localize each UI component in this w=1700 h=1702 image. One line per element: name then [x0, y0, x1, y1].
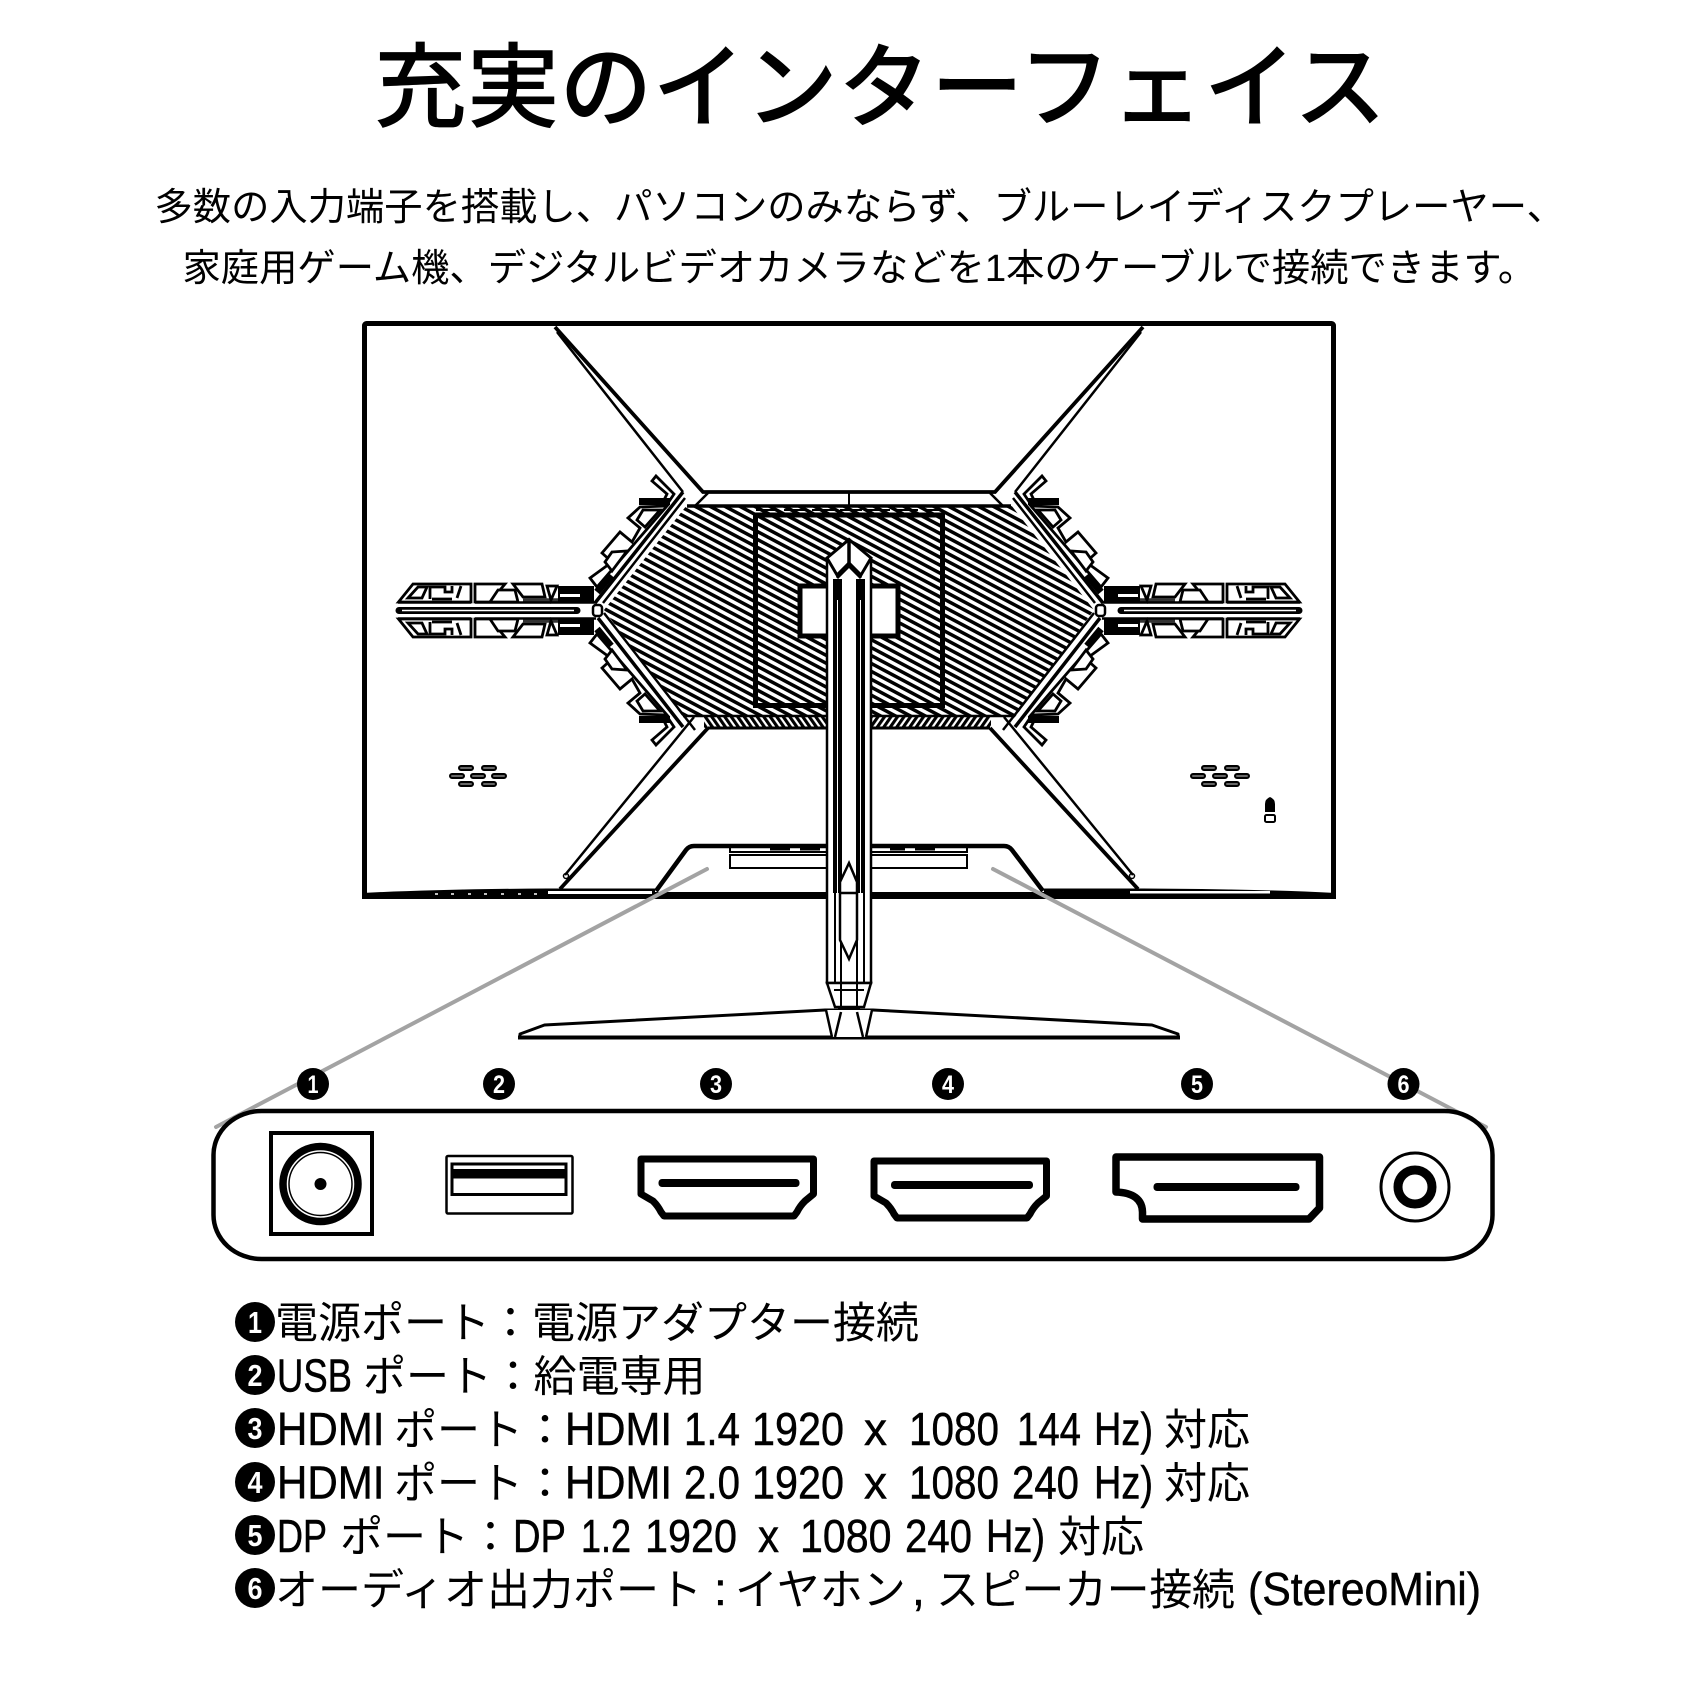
- list item 6: ,: [912, 1563, 925, 1615]
- list item 5: [235, 1510, 1144, 1562]
- stand base: [520, 1010, 1178, 1038]
- list item 5: 1.2: [581, 1510, 631, 1562]
- list item 5: DP: [277, 1510, 327, 1562]
- list item 3: Hz): [1094, 1403, 1153, 1455]
- icon: security lock slot: [1265, 797, 1275, 822]
- list item 4: 1080: [909, 1456, 999, 1508]
- description text: [154, 186, 1565, 290]
- list item 2: [235, 1350, 706, 1402]
- list item 5: DP: [513, 1510, 566, 1562]
- neck diamond: [840, 863, 857, 959]
- list item 5: Hz): [986, 1510, 1045, 1562]
- list item 4: 240: [1012, 1456, 1079, 1508]
- list item 3: 3: [248, 1411, 262, 1446]
- title: 充実のインターフェイス: [374, 36, 1386, 140]
- port number markers: 3: [710, 1071, 722, 1099]
- list item 3: 対応: [1164, 1407, 1250, 1455]
- list item 3: 144: [1017, 1403, 1081, 1455]
- list item 1: 電源アダプター接続: [532, 1300, 919, 1348]
- list item 2: ：: [492, 1354, 534, 1402]
- list item 4: x: [864, 1456, 887, 1508]
- list item 5: ポート: [340, 1514, 469, 1562]
- dark vent strip: [704, 717, 827, 728]
- list item 6: スピーカー接続: [936, 1567, 1235, 1615]
- icon: power port: [271, 1133, 372, 1234]
- list item 4: Hz): [1094, 1456, 1153, 1508]
- list item 4: [235, 1456, 1250, 1508]
- list item 1: [235, 1300, 919, 1348]
- list item 5: ：: [469, 1514, 512, 1562]
- list item 4: ：: [524, 1460, 566, 1508]
- list item 3: ポート: [394, 1407, 523, 1455]
- list item 4: HDMI: [277, 1456, 384, 1508]
- stand neck: [827, 540, 871, 983]
- list item 2: 給電専用: [534, 1354, 706, 1402]
- list item 5: 1080: [800, 1510, 892, 1562]
- neck bands: [838, 579, 860, 893]
- icon: audio jack: [1381, 1153, 1449, 1221]
- list item 2: 2: [248, 1358, 262, 1393]
- list item 5: 5: [248, 1518, 262, 1553]
- port number markers: 1: [308, 1071, 319, 1099]
- list item 4: HDMI: [565, 1456, 672, 1508]
- speaker grille left: [450, 766, 506, 786]
- mount brackets: [800, 586, 830, 636]
- description text: 家庭用ゲーム機、デジタルビデオカメラなどを1本のケーブルで接続できます。: [182, 247, 1536, 290]
- list item 5: x: [758, 1510, 779, 1562]
- list item 1: 1: [248, 1305, 262, 1340]
- neck head chevrons: [827, 540, 871, 575]
- list item 4: 対応: [1164, 1460, 1250, 1508]
- list item 3: [235, 1403, 1250, 1455]
- panel: port strip: [214, 1111, 1492, 1259]
- list item 4: ポート: [394, 1460, 523, 1508]
- lower wings: [560, 717, 1138, 889]
- monitor outline: [364, 324, 1334, 896]
- list item 5: 対応: [1058, 1514, 1144, 1562]
- list item 3: 1080: [909, 1403, 999, 1455]
- monitor rear illustration: [362, 324, 1336, 899]
- list item 6: [235, 1563, 1481, 1615]
- list item 2: ポート: [363, 1354, 492, 1402]
- monitor stand: [518, 540, 1180, 1038]
- bottom bezel: [362, 888, 1336, 899]
- hatched hexagon back panel: [604, 505, 1094, 717]
- list item 4: 2.0: [684, 1456, 740, 1508]
- port number markers: 5: [1191, 1071, 1203, 1099]
- neck yoke: [827, 983, 871, 1007]
- port number markers: [297, 1068, 1420, 1100]
- description text: 多数の入力端子を搭載し、パソコンのみならず、ブルーレイディスクプレーヤー、: [154, 186, 1565, 229]
- bottom port cutout: [656, 846, 1043, 891]
- VESA mount plate: [756, 515, 942, 706]
- list item 5: 1920: [645, 1510, 737, 1562]
- list item 3: 1.4: [684, 1403, 740, 1455]
- port list: [235, 1300, 1481, 1615]
- upper wings: [555, 327, 1143, 506]
- list item 1: 電源ポート: [275, 1300, 490, 1348]
- icon: HDMI port 2: [874, 1161, 1046, 1218]
- list item 6: (StereoMini): [1248, 1563, 1481, 1615]
- speaker grille right: [1191, 766, 1249, 786]
- list item 6: 6: [248, 1571, 262, 1606]
- port number markers: 4: [942, 1071, 954, 1099]
- side fins: [398, 476, 1300, 745]
- list item 6: オーディオ出力ポート: [275, 1567, 702, 1615]
- list item 3: HDMI: [565, 1403, 672, 1455]
- list item 3: x: [864, 1403, 887, 1455]
- list item 2: USB: [277, 1350, 352, 1402]
- list item 1: ：: [489, 1300, 532, 1348]
- icon: DisplayPort: [1116, 1157, 1320, 1219]
- list item 6: :: [714, 1563, 727, 1615]
- list item 3: 1920: [752, 1403, 844, 1455]
- list item 3: HDMI: [277, 1403, 384, 1455]
- callout lines: [216, 869, 1486, 1127]
- list item 4: 4: [248, 1465, 263, 1500]
- icon: USB port: [446, 1156, 572, 1214]
- port number markers: 2: [493, 1071, 505, 1099]
- port number markers: 6: [1398, 1071, 1410, 1099]
- list item 6: イヤホン: [735, 1567, 906, 1615]
- icon: HDMI port 1: [641, 1159, 814, 1216]
- list item 3: ：: [524, 1407, 566, 1455]
- list item 4: 1920: [752, 1456, 844, 1508]
- list item 5: 240: [905, 1510, 972, 1562]
